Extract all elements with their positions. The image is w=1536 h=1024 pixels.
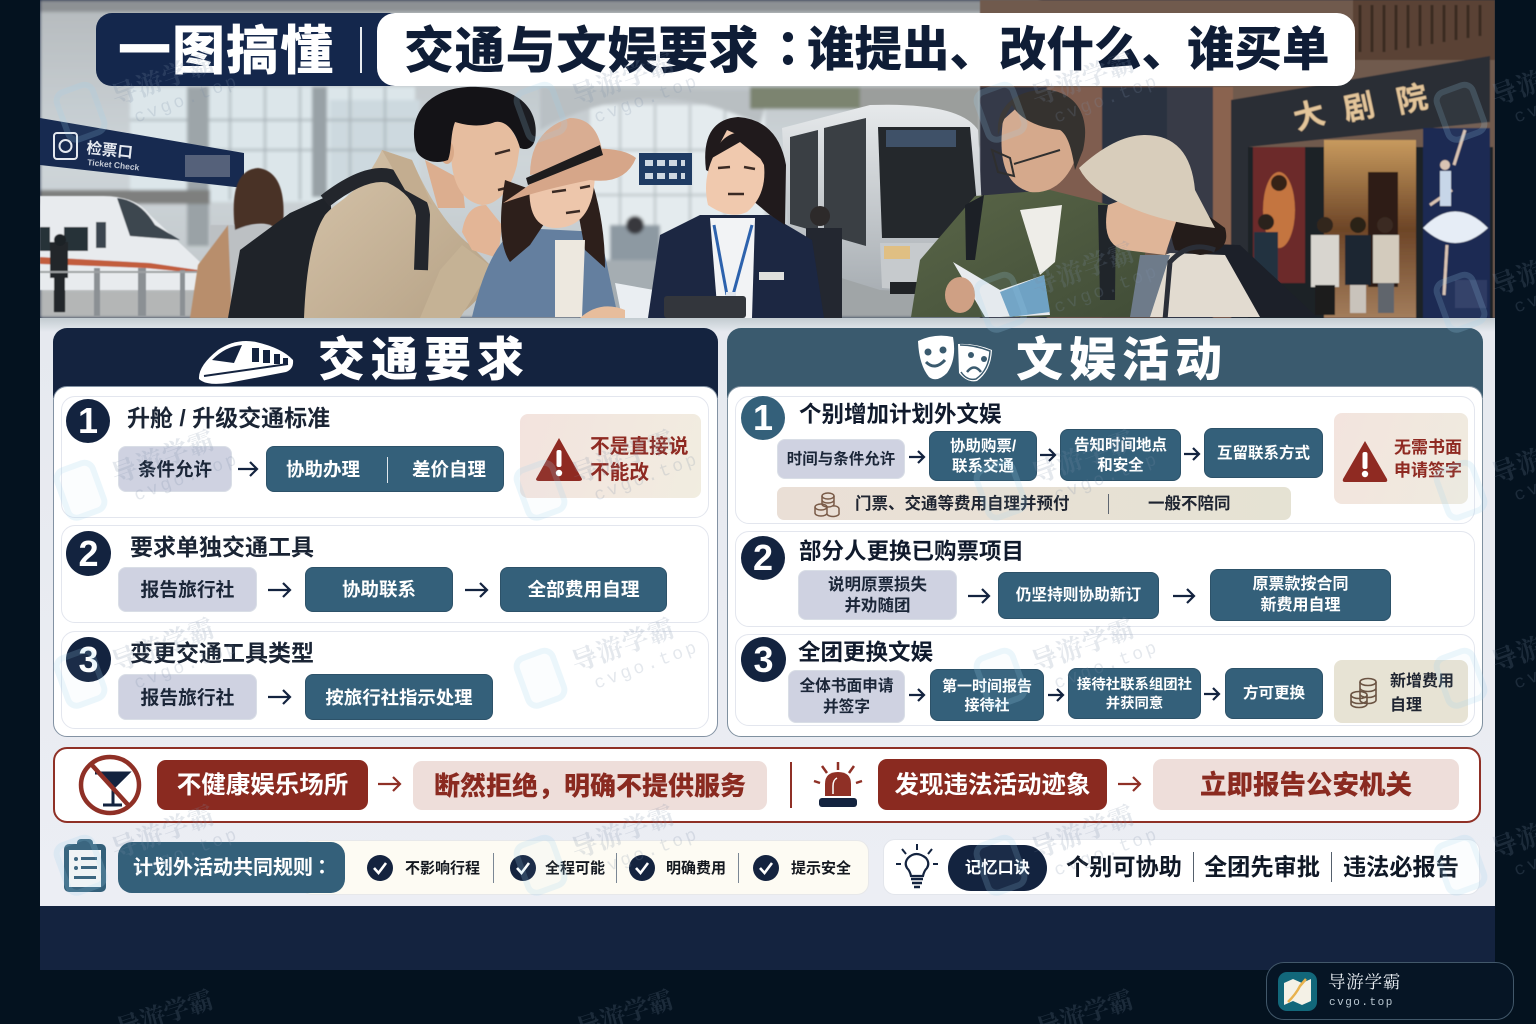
memory formula strip bbox=[883, 839, 1480, 895]
rule: 不影响行程 bbox=[367, 855, 480, 881]
panel body bbox=[727, 386, 1483, 737]
arrow bbox=[1184, 447, 1200, 461]
bus bbox=[782, 105, 985, 318]
box: 发现违法活动迹象: 发现违法活动迹象 bbox=[894, 772, 1090, 799]
watermark layer: 导游学霸 bbox=[1028, 237, 1139, 302]
icon: clipboard bbox=[64, 839, 106, 892]
row 2 card bbox=[61, 525, 709, 623]
title main pill: 改什么、 bbox=[999, 24, 1189, 77]
title main pill: 谁买单 bbox=[1187, 24, 1330, 77]
watermark layer: 导游学霸 bbox=[108, 800, 219, 865]
rule: 不影响行程: 不影响行程 bbox=[405, 860, 480, 877]
watermark layer: cvgo.top bbox=[132, 72, 242, 128]
box: 方可更换: 方可更换 bbox=[1243, 685, 1305, 702]
rule: 明确费用: 明确费用 bbox=[666, 860, 726, 877]
box: 说明原票损失: 说明原票损失 bbox=[828, 576, 927, 594]
arrow bbox=[268, 582, 292, 598]
young man with backpack bbox=[228, 87, 536, 318]
watermark layer: 导游学霸 bbox=[1028, 613, 1139, 678]
formula: 全团先审批: 全团先审批 bbox=[1204, 854, 1320, 880]
right wall: 大 bbox=[1290, 95, 1329, 137]
arrow bbox=[909, 688, 926, 702]
watermark layer: 导游学霸 bbox=[568, 425, 679, 490]
box: 全部费用自理: 全部费用自理 bbox=[527, 579, 640, 600]
watermark layer: cvgo.top bbox=[132, 638, 242, 694]
step 3: change transport type bbox=[66, 637, 493, 720]
hero photo illustration bbox=[40, 0, 1495, 318]
box: 说明原票损失: 并劝随团 bbox=[844, 597, 910, 615]
box: 全体书面申请: 并签字 bbox=[823, 698, 870, 716]
watermark layer: cvgo.top bbox=[592, 638, 702, 694]
icon: coins bbox=[814, 492, 840, 518]
no accompany text: 一般不陪同 bbox=[1148, 495, 1230, 513]
box: 断然拒绝: 断然拒绝，明确不提供服务 bbox=[434, 771, 746, 801]
panel: 交通要求 bbox=[53, 328, 718, 737]
step 2: separate transport bbox=[66, 531, 667, 612]
icon: light bulb bbox=[896, 844, 938, 890]
box: 协助购票 bbox=[929, 431, 1037, 481]
row 3 card bbox=[735, 634, 1475, 726]
red warning band bbox=[53, 747, 1481, 823]
box: 仍坚持则协助新订: 仍坚持则协助新订 bbox=[1016, 587, 1141, 604]
panel heading text: 交通要求 bbox=[318, 333, 530, 386]
rules label: 计划外活动共同规则 bbox=[133, 857, 313, 879]
rules background bbox=[300, 840, 869, 895]
box: 原票款按合同: 原票款按合同 bbox=[1252, 576, 1348, 593]
box: 协助购票: 联系交通 bbox=[952, 458, 1014, 475]
watermark layer: cvgo.top bbox=[592, 72, 702, 128]
activity 3: whole group swap bbox=[741, 637, 1468, 723]
arrow bbox=[1040, 448, 1056, 462]
box: 接待社联系组团社: 并获同意 bbox=[1106, 696, 1163, 712]
step title: 升舱 / 升级交通标准 bbox=[127, 405, 330, 431]
train bbox=[40, 196, 200, 316]
box: 报告旅行社: 报告旅行社 bbox=[141, 687, 234, 708]
box: 协助办理 差价自理 bbox=[266, 446, 504, 492]
icon: no alcohol bbox=[78, 754, 142, 816]
box: 告知时间地点 bbox=[1060, 429, 1181, 481]
right wall: 院 bbox=[1393, 79, 1431, 120]
arrow bbox=[1118, 776, 1142, 792]
box: 原票款按合同 bbox=[1210, 569, 1391, 621]
young woman with straw hat bbox=[472, 118, 652, 318]
activity 1: add optional entertainment bbox=[741, 396, 1468, 520]
warning text: 申请签字 bbox=[1394, 461, 1462, 480]
right wall bbox=[980, 0, 1495, 318]
older woman with sun hat bbox=[1079, 135, 1282, 318]
icon: bullet train bbox=[198, 341, 294, 384]
watermark layer: 导游学霸 bbox=[568, 800, 679, 865]
box: 按旅行社指示处理: 按旅行社指示处理 bbox=[325, 687, 473, 708]
arrow bbox=[1173, 588, 1196, 604]
watermark layer: cvgo.top bbox=[132, 450, 242, 506]
box: 全体书面申请: 全体书面申请 bbox=[799, 678, 894, 695]
box: 说明原票损失 bbox=[798, 570, 957, 620]
warning text: 无需书面 bbox=[1394, 438, 1462, 457]
icon: warning triangle bbox=[536, 438, 582, 481]
arrow bbox=[1204, 687, 1220, 701]
box: 条件允许 bbox=[118, 446, 232, 492]
rule: 明确费用 bbox=[629, 855, 726, 881]
watermark layer: cvgo.top bbox=[1052, 450, 1162, 506]
row 1 card bbox=[61, 396, 709, 518]
box: 报告旅行社: 报告旅行社 bbox=[141, 579, 234, 600]
panel header bbox=[727, 328, 1483, 398]
number badge bbox=[741, 396, 785, 440]
box: 不健康娱乐场所: 不健康娱乐场所 bbox=[177, 772, 348, 799]
icon: coins bbox=[1350, 678, 1377, 708]
number badge: 1 bbox=[78, 400, 98, 441]
number badge bbox=[66, 531, 111, 576]
step title: 部分人更换已购票项目 bbox=[799, 539, 1024, 564]
callout: 新增费用 bbox=[1334, 660, 1468, 723]
box: 互留联系方式: 互留联系方式 bbox=[1217, 445, 1310, 462]
number badge: 1 bbox=[753, 397, 773, 438]
right wall: 剧 bbox=[1340, 87, 1378, 128]
box: 接待社联系组团社 bbox=[1068, 668, 1201, 719]
watermark layer: 导游学霸 bbox=[568, 613, 679, 678]
older man in green jacket bbox=[911, 90, 1146, 317]
box: 第一时间报告: 第一时间报告 bbox=[942, 678, 1032, 694]
step title: 变更交通工具类型 bbox=[130, 640, 314, 666]
watermark layer: cvgo.top bbox=[132, 825, 242, 881]
rule: 提示安全: 提示安全 bbox=[791, 860, 851, 877]
arrow bbox=[465, 582, 488, 598]
icon: warning triangle bbox=[1342, 441, 1388, 482]
arrow bbox=[909, 450, 926, 464]
panel: 文娱活动 bbox=[727, 328, 1483, 737]
activity 2: partial swap bbox=[741, 536, 1391, 621]
pill: 记忆口诀: 记忆口诀 bbox=[965, 859, 1030, 877]
arrow bbox=[268, 689, 292, 705]
rule: 提示安全 bbox=[753, 855, 851, 881]
rules label bbox=[118, 842, 345, 893]
row 1 card bbox=[735, 396, 1475, 524]
warning text: 不是直接说 bbox=[590, 436, 688, 458]
text bbox=[1390, 672, 1454, 714]
box: 立即报告公安机关: 立即报告公安机关 bbox=[1200, 770, 1412, 800]
brand badge bbox=[1266, 962, 1514, 1020]
box: 全体书面申请 bbox=[788, 670, 905, 723]
warning text bbox=[590, 436, 688, 484]
box: 告知时间地点: 告知时间地点 bbox=[1074, 437, 1167, 454]
box: 条件允许: 条件允许 bbox=[138, 459, 212, 480]
panel heading text: 文娱活动 bbox=[1016, 333, 1228, 386]
box: 原票款按合同: 新费用自理 bbox=[1260, 597, 1340, 614]
box: 全部费用自理 bbox=[500, 567, 667, 612]
number badge bbox=[66, 637, 111, 682]
rule: 全程可能: 全程可能 bbox=[545, 860, 605, 877]
watermark layer: cvgo.top bbox=[1052, 638, 1162, 694]
woman with tan bag bbox=[190, 168, 284, 318]
arrow bbox=[1048, 688, 1064, 702]
watermark layer: cvgo.top bbox=[592, 825, 702, 881]
panel body bbox=[53, 386, 718, 737]
title main pill bbox=[377, 13, 1355, 86]
title banner bbox=[96, 13, 1355, 86]
box: 发现违法活动迹象 bbox=[878, 759, 1107, 810]
watermark layer: cvgo.top bbox=[592, 450, 702, 506]
content background bbox=[40, 318, 1495, 906]
formula: 个别可协助: 个别可协助 bbox=[1066, 854, 1182, 880]
text: 新增费用 bbox=[1390, 673, 1454, 690]
step title: 要求单独交通工具 bbox=[130, 534, 314, 560]
box: 时间与条件允许 bbox=[777, 439, 905, 479]
title main pill: 交通与文娱要求 bbox=[404, 23, 760, 79]
cost text: 门票、交通等费用自理并预付 bbox=[855, 495, 1070, 513]
watermark layer: 导游学霸 bbox=[1028, 800, 1139, 865]
box: 按旅行社指示处理 bbox=[305, 674, 493, 720]
title main pill: 谁提出、 bbox=[807, 24, 997, 77]
warning text bbox=[1394, 438, 1462, 480]
box: 断然拒绝 bbox=[413, 761, 767, 810]
number badge: 3 bbox=[753, 638, 774, 680]
rule: 全程可能 bbox=[510, 855, 605, 881]
ticket check sign: Ticket Check bbox=[87, 157, 140, 172]
ticket check sign bbox=[40, 118, 692, 188]
ticket check sign: 检票口 bbox=[86, 138, 134, 162]
box: 立即报告公安机关 bbox=[1153, 759, 1459, 810]
row 2 card bbox=[735, 531, 1475, 627]
watermark layer: 导游学霸 bbox=[568, 47, 679, 112]
number badge: 2 bbox=[78, 532, 99, 574]
title main pill: ： bbox=[764, 24, 812, 77]
watermark layer: 导游学霸 bbox=[1028, 425, 1139, 490]
box: 时间与条件允许: 时间与条件允许 bbox=[787, 451, 895, 468]
arrow bbox=[968, 588, 990, 604]
box: 接待社联系组团社: 接待社联系组团社 bbox=[1077, 677, 1192, 693]
brand url: cvgo.top bbox=[1329, 997, 1394, 1009]
box: 方可更换 bbox=[1225, 668, 1323, 719]
watermark layer: cvgo.top bbox=[1052, 72, 1162, 128]
number badge: 3 bbox=[78, 638, 99, 680]
brand name: 导游学霸 bbox=[1328, 972, 1401, 992]
number badge bbox=[741, 536, 785, 580]
arrow bbox=[378, 776, 402, 792]
box: 协助联系: 协助联系 bbox=[342, 579, 416, 600]
step title: 全团更换文娱 bbox=[798, 640, 933, 665]
warning callout bbox=[520, 414, 701, 498]
box: 仍坚持则协助新订 bbox=[998, 572, 1159, 619]
box: 报告旅行社 bbox=[118, 674, 257, 720]
number badge: 2 bbox=[753, 537, 773, 578]
box: 报告旅行社 bbox=[118, 567, 257, 612]
box: 第一时间报告: 接待社 bbox=[964, 697, 1010, 714]
arrow bbox=[238, 461, 258, 477]
title left badge: 一图搞懂 bbox=[118, 22, 334, 81]
formula: 违法必报告: 违法必报告 bbox=[1343, 854, 1459, 880]
icon: theatre masks bbox=[918, 336, 992, 382]
station backdrop bbox=[40, 0, 1040, 318]
box: 不健康娱乐场所 bbox=[157, 760, 368, 810]
box: 协助联系 bbox=[305, 567, 453, 612]
box: 协助购票: 协助购票/ bbox=[950, 438, 1016, 455]
title left badge bbox=[96, 13, 416, 86]
watermark layer: 导游学霸 bbox=[108, 425, 219, 490]
text: 自理 bbox=[1390, 697, 1422, 714]
panel header bbox=[53, 328, 718, 398]
warning text: 不能改 bbox=[590, 462, 649, 484]
box: 第一时间报告 bbox=[930, 669, 1044, 721]
step title: 个别增加计划外文娱 bbox=[799, 402, 1002, 427]
watermark layer: cvgo.top bbox=[1052, 825, 1162, 881]
box: 协助办理 差价自理: 协助办理 bbox=[286, 459, 360, 480]
watermark layer: cvgo.top bbox=[1052, 262, 1162, 318]
box: 协助办理 差价自理: 差价自理 bbox=[412, 459, 486, 480]
rules label: ： bbox=[312, 857, 332, 879]
cost bar bbox=[777, 487, 1291, 520]
common rules strip bbox=[64, 839, 869, 895]
pill: 记忆口诀 bbox=[948, 845, 1047, 891]
box: 告知时间地点: 和安全 bbox=[1097, 457, 1144, 474]
box: 互留联系方式 bbox=[1204, 428, 1323, 478]
watermark layer: 导游学霸 bbox=[108, 613, 219, 678]
number badge bbox=[66, 399, 110, 443]
watermark layer: 导游学霸 bbox=[108, 47, 219, 112]
icon: map logo bbox=[1278, 972, 1317, 1011]
number badge bbox=[741, 637, 786, 682]
bottom watermark strip bbox=[0, 985, 1536, 1024]
icon: siren bbox=[814, 762, 862, 807]
step 1: upgrade bbox=[66, 399, 701, 498]
warning callout bbox=[1334, 413, 1468, 504]
watermark layer: 导游学霸 bbox=[1028, 47, 1139, 112]
staff woman in navy suit bbox=[648, 117, 824, 318]
row 3 card bbox=[61, 631, 709, 729]
